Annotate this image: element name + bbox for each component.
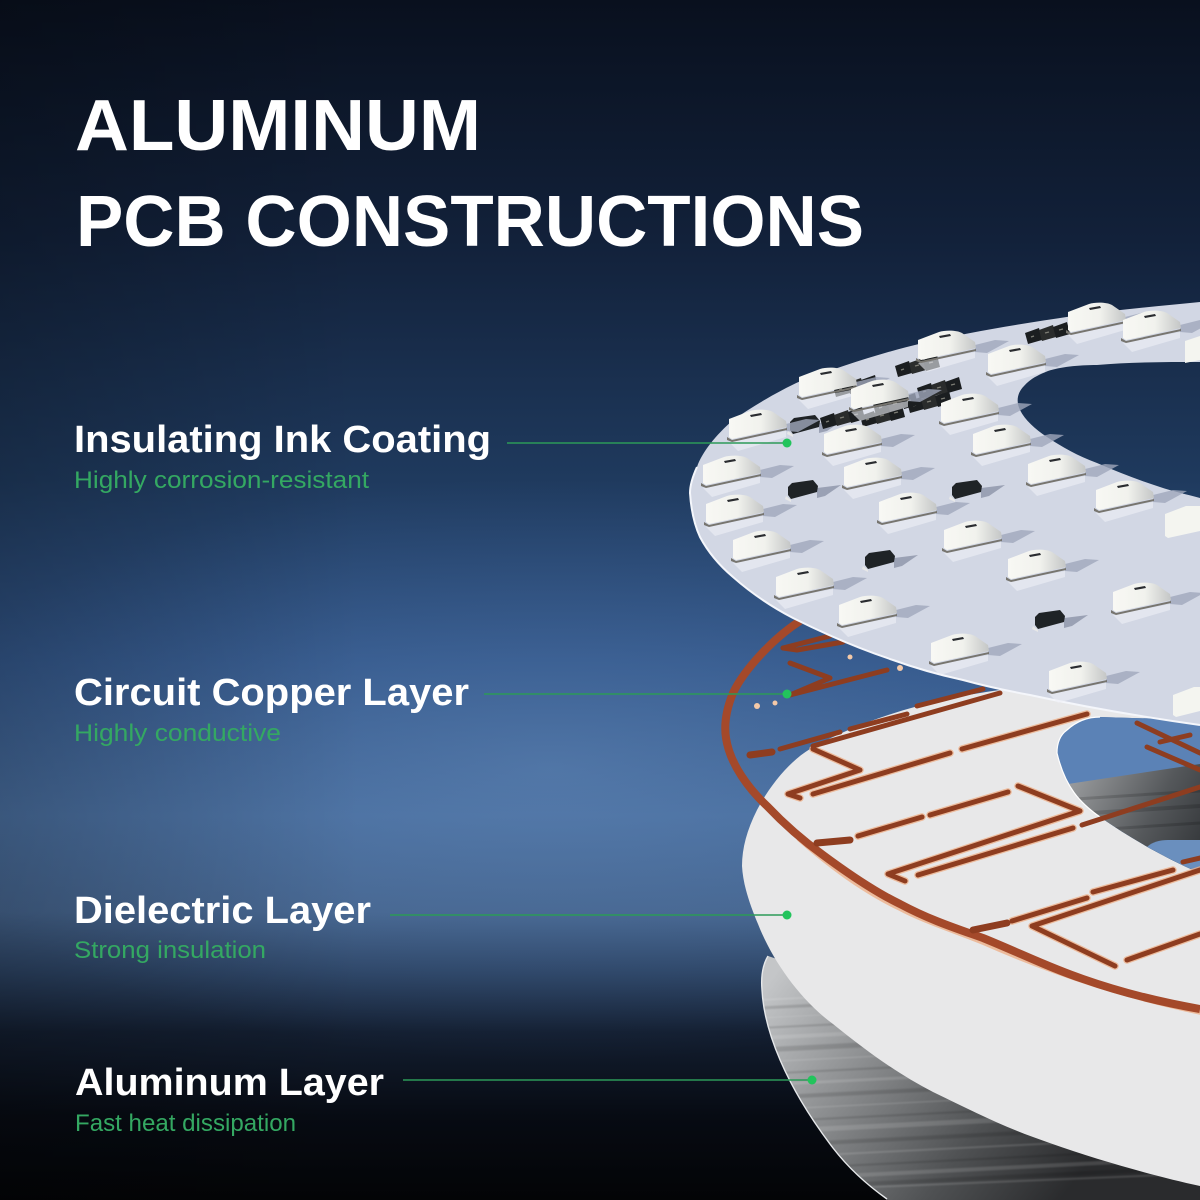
copper traces xyxy=(750,636,1200,966)
leader line: insulating ink coating xyxy=(507,438,792,448)
circuit copper layer xyxy=(725,621,1200,1011)
LED components xyxy=(701,303,1200,703)
title xyxy=(75,86,864,262)
leader line: aluminum layer xyxy=(403,1076,816,1084)
board rim highlight xyxy=(690,467,1200,725)
hole through the dielectric layer xyxy=(1058,717,1200,870)
aluminum layer disc xyxy=(750,940,1200,1200)
label: dielectric layer: Strong insulation xyxy=(74,937,266,964)
title: ALUMINUM xyxy=(75,86,481,166)
label: circuit copper layer: Circuit Copper Layer xyxy=(74,672,469,714)
label: circuit copper layer: Highly conductive xyxy=(74,720,281,747)
label: aluminum layer: Fast heat dissipation xyxy=(75,1110,296,1137)
label: insulating ink coating: Highly corrosion-resistant xyxy=(74,467,369,494)
label: insulating ink coating: Insulating Ink Coating xyxy=(74,419,491,461)
label: aluminum layer: Aluminum Layer xyxy=(75,1062,384,1104)
leader line: circuit copper layer xyxy=(484,690,792,698)
title: PCB CONSTRUCTIONS xyxy=(76,182,864,262)
label: dielectric layer: Dielectric Layer xyxy=(74,890,371,932)
label: circuit copper layer xyxy=(74,672,469,747)
black chips xyxy=(785,322,1088,632)
label: insulating ink coating xyxy=(74,419,491,494)
dielectric layer disc xyxy=(742,690,1200,1186)
outer copper ring xyxy=(725,621,1200,1009)
copper highlights xyxy=(788,714,1200,1011)
label: dielectric layer xyxy=(74,890,371,964)
leader line: dielectric layer xyxy=(390,910,792,920)
label: aluminum layer xyxy=(75,1062,384,1137)
insulating ink coating board xyxy=(690,302,1200,725)
copper pads xyxy=(754,654,903,709)
LEDs cut by the right edge xyxy=(1165,336,1200,717)
